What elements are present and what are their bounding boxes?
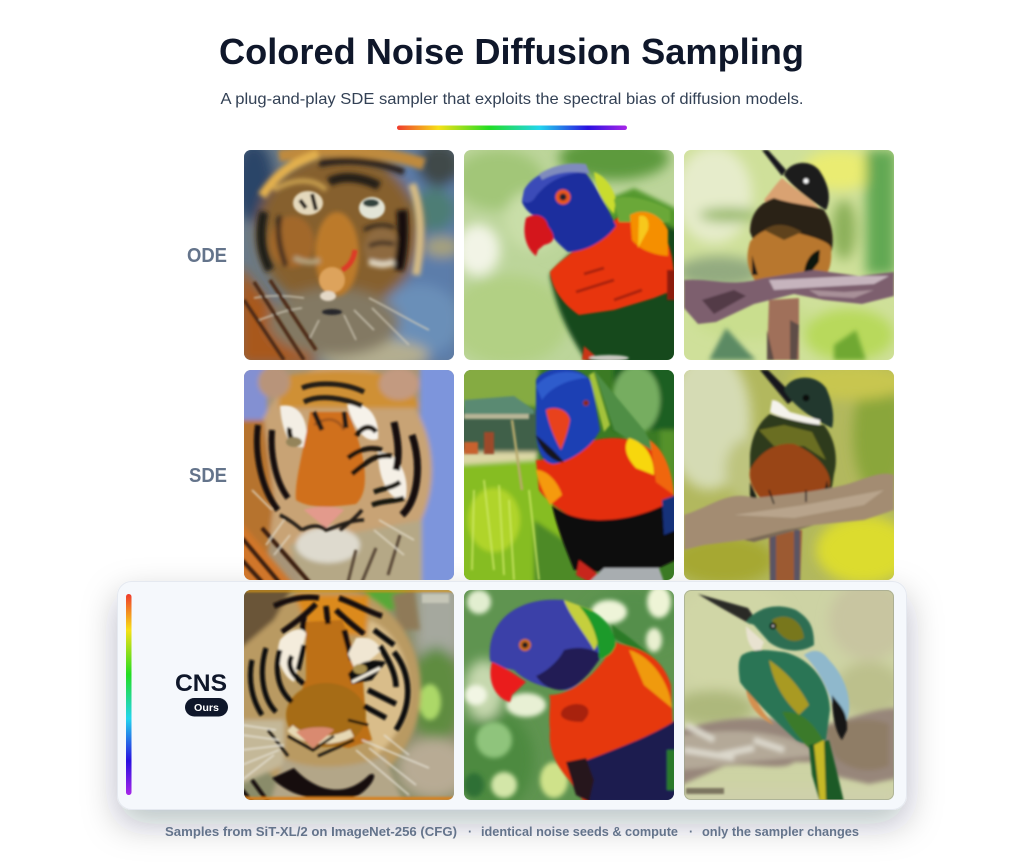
footer caption: ·: [689, 825, 693, 839]
title: Colored Noise Diffusion Sampling: [219, 31, 804, 72]
badge: Ours: Ours: [194, 702, 219, 714]
image: SDE tiger: [239, 364, 460, 585]
badge: Ours: [185, 698, 228, 716]
image: ODE parrot: [464, 150, 674, 360]
image: CNS parrot: [464, 590, 674, 800]
image: CNS jacamar: [684, 590, 894, 800]
subtitle: A plug-and-play SDE sampler that exploits the spectral bias of diffusion models.: [220, 91, 804, 108]
footer caption: only the sampler changes: [702, 825, 859, 839]
row label: SDE: SDE: [189, 465, 227, 487]
footer caption: Samples from SiT-XL/2 on ImageNet-256 (CFG): [165, 825, 457, 839]
row label: CNS: CNS: [175, 670, 227, 697]
footer caption: identical noise seeds & compute: [481, 825, 678, 839]
panel: CNS highlight row: [118, 582, 906, 810]
footer caption: [165, 825, 859, 839]
image: ODE jacamar: [676, 147, 896, 361]
image: CNS tiger: [244, 590, 454, 800]
image: SDE parrot: [459, 365, 679, 585]
row label: ODE: ODE: [187, 245, 227, 267]
rainbow accent bar: [126, 594, 132, 795]
rainbow divider: [397, 126, 627, 130]
image: ODE tiger: [244, 150, 454, 360]
footer caption: ·: [468, 825, 472, 839]
image: SDE jacamar: [684, 370, 894, 580]
